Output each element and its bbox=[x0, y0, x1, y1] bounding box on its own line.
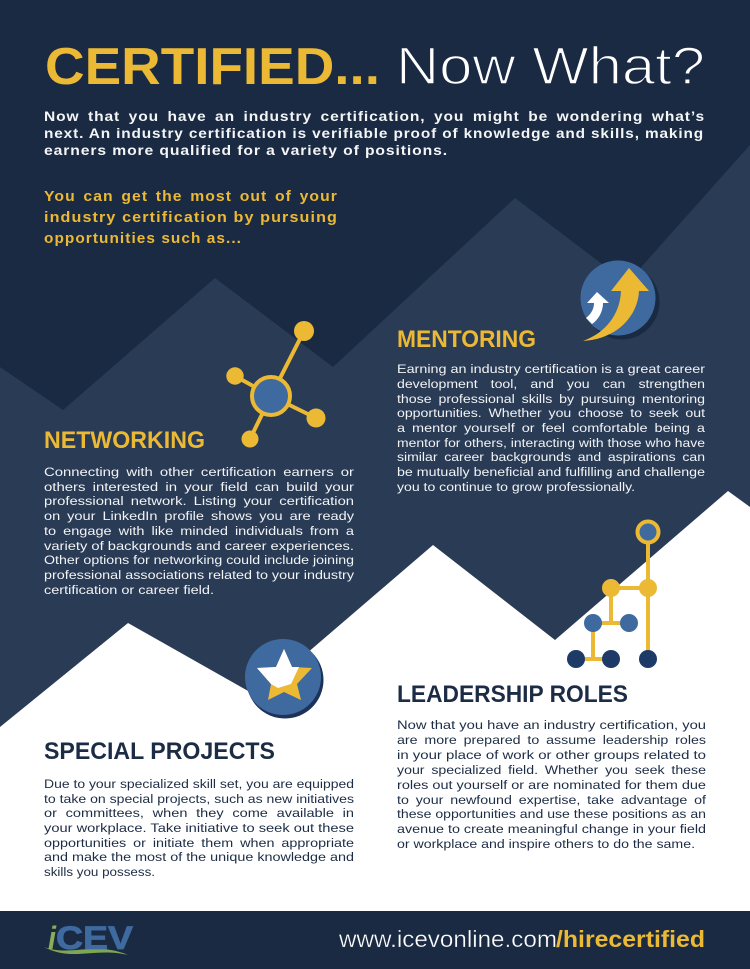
text: networking: on your LinkedIn profile shows you are ready bbox=[44, 509, 355, 523]
text: mentoring: mentor for others, interacting with those who have bbox=[397, 436, 705, 450]
text: leadership roles bbox=[397, 718, 707, 851]
text: mentoring: be mutually beneficial and fulfilling and challenge bbox=[397, 465, 705, 479]
footer url bbox=[338, 926, 705, 952]
intro text: Now that you have an industry certification, you might be wondering what’s bbox=[44, 108, 705, 124]
footer band bbox=[0, 911, 750, 969]
text: special projects: to take on special projects, such as new initiatives bbox=[44, 792, 354, 806]
text: networking: to engage with like minded individuals from a bbox=[44, 524, 354, 538]
text: special projects: skills you possess. bbox=[44, 865, 155, 879]
text: leadership roles: to your newfound expertise, take advantage of bbox=[397, 793, 707, 807]
text: networking: certification or career field. bbox=[44, 583, 214, 597]
text: leadership roles: or workplace and inspire others to do the same. bbox=[397, 837, 695, 851]
yellow lead-in text bbox=[44, 189, 338, 247]
text: networking: Connecting with other certification earners or bbox=[44, 465, 354, 479]
text: networking: variety of backgrounds and career experiences. bbox=[44, 539, 354, 553]
text: special projects: and make the most of the unique knowledge and bbox=[44, 850, 354, 864]
icon: leadership org tree bbox=[567, 522, 658, 668]
heading: networking: NETWORKING bbox=[44, 427, 205, 454]
logo: iCEV: i bbox=[48, 920, 57, 956]
title: CERTIFIED... bbox=[45, 38, 380, 96]
intro text: earners more qualified for a variety of positions. bbox=[44, 142, 448, 158]
yellow lead-in text: industry certification by pursuing bbox=[44, 210, 338, 226]
text: networking: professional network. Listing your certification bbox=[44, 494, 354, 508]
text: special projects: or committees, when they come available in bbox=[44, 806, 354, 820]
text: mentoring: opportunities. Whether you choose to seek out bbox=[397, 406, 706, 420]
text: special projects: Due to your specialized skill set, you are equipped bbox=[44, 777, 354, 791]
text: leadership roles: are more prepared to assume leadership roles bbox=[397, 733, 706, 747]
logo: iCEV: CEV bbox=[56, 920, 134, 956]
text: mentoring: a mentor yourself or feel comfortable being a bbox=[397, 421, 705, 435]
icon: networking hub bbox=[226, 321, 326, 448]
icon: special projects star bbox=[245, 639, 324, 718]
text: leadership roles: your specialized field. Whether you seek these bbox=[397, 763, 706, 777]
heading: leadership roles: LEADERSHIP ROLES bbox=[397, 681, 628, 708]
text: mentoring: similar career backgrounds and aspirations can bbox=[397, 450, 705, 464]
yellow lead-in text: You can get the most out of your bbox=[44, 189, 338, 205]
text: mentoring: development tool, and you can strengthen bbox=[397, 377, 705, 391]
text: mentoring bbox=[397, 362, 706, 494]
yellow lead-in text: opportunities such as... bbox=[44, 231, 242, 247]
intro text bbox=[44, 108, 705, 158]
text: special projects bbox=[44, 777, 354, 879]
text: leadership roles: avenue to create meaningful change in your field bbox=[397, 822, 706, 836]
text: networking: others interested in your field can build your bbox=[44, 480, 354, 494]
text: mentoring: you to continue to grow professionally. bbox=[397, 480, 635, 494]
text: networking bbox=[44, 465, 355, 597]
heading: mentoring: MENTORING bbox=[397, 326, 536, 353]
heading: special projects: SPECIAL PROJECTS bbox=[44, 738, 275, 765]
icon: mentoring arrows bbox=[580, 260, 660, 341]
text: mentoring: Earning an industry certification is a great career bbox=[397, 362, 705, 376]
footer url: /hirecertified bbox=[556, 926, 705, 952]
title bbox=[45, 37, 705, 96]
text: networking: professional associations related to your industry bbox=[44, 568, 355, 582]
text: special projects: opportunities or initiate them when appropriate bbox=[44, 836, 354, 850]
footer url: www.icevonline.com bbox=[338, 926, 557, 952]
intro text: next. An industry certification is verifiable proof of knowledge and skills, making bbox=[44, 125, 704, 141]
title: Now What? bbox=[396, 37, 705, 96]
text: leadership roles: Now that you have an industry certification, you bbox=[397, 718, 706, 732]
text: leadership roles: in your place of work or other groups related to bbox=[397, 748, 706, 762]
text: mentoring: those professional skills by pursuing mentoring bbox=[397, 392, 705, 406]
text: leadership roles: these opportunities and use these positions as an bbox=[397, 807, 706, 821]
text: networking: Other options for networking could include joining bbox=[44, 553, 354, 567]
background: mid-tone mountains bbox=[0, 145, 750, 760]
background: white mountains bbox=[0, 491, 750, 911]
text: leadership roles: roles out yourself or are nominated for them due bbox=[397, 778, 706, 792]
text: special projects: your workplace. Take initiative to seek out these bbox=[44, 821, 354, 835]
